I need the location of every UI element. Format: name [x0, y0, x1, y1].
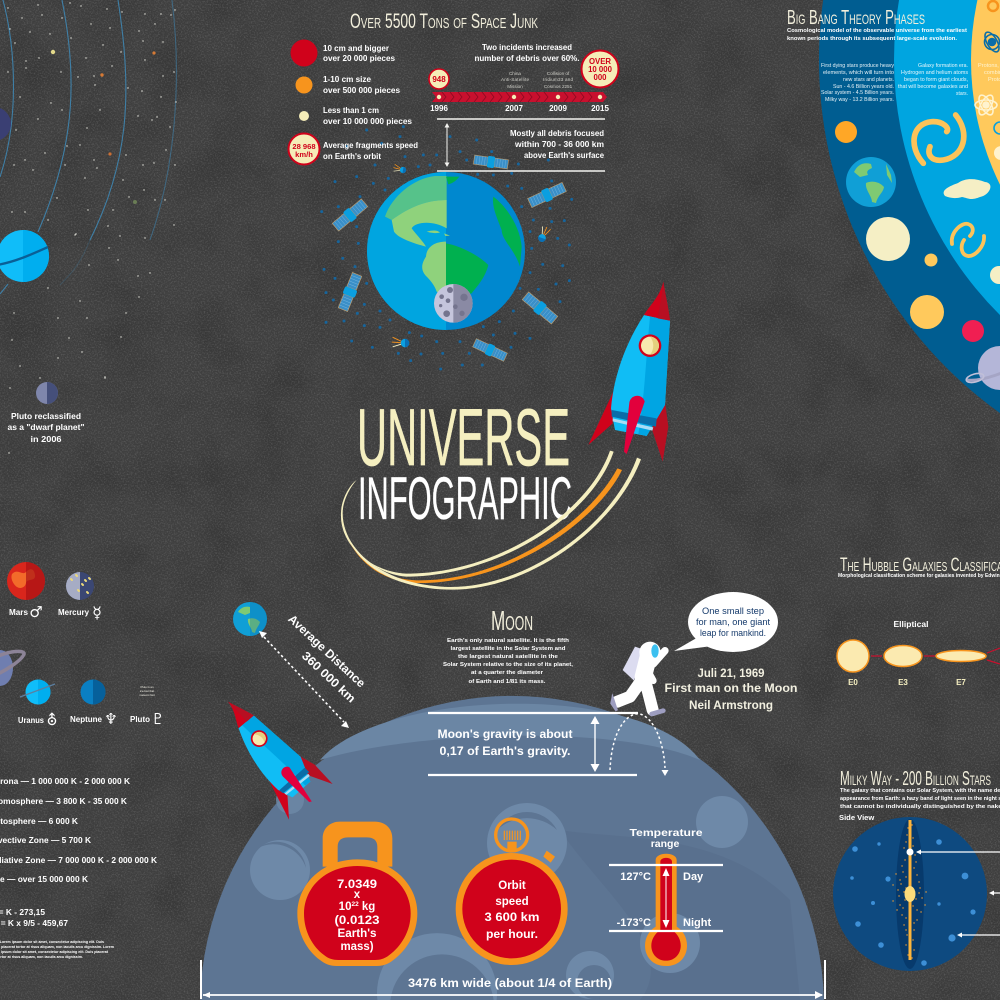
legend: debris sizes: on Earth's orbit: [323, 152, 381, 161]
icon: astronaut: [612, 642, 665, 714]
callout: speech bubble: One small step: [702, 606, 764, 616]
icon: spiral galaxy: [914, 115, 964, 163]
panel: sun temperature list: [0, 776, 157, 959]
callout: speech bubble: leap for mankind.: [700, 628, 766, 638]
text: moon description: [443, 638, 573, 685]
timeline: debris growth: 2007: [505, 104, 523, 113]
text: outer phase: Sun - 4.6 Billion years old.: [833, 84, 894, 90]
chart: temperature range: 127°C: [620, 871, 651, 883]
label: Uranus: [18, 711, 58, 729]
galaxy: E3: [884, 646, 922, 687]
note: Pluto: Pluto is an: [140, 685, 154, 689]
text: milky way description: that cannot be individually distinguished by the naked eye.: [840, 804, 1000, 810]
moon beside earth: [434, 284, 473, 323]
icon: cream dot: [990, 266, 1000, 284]
panel: milky way: [833, 768, 1000, 971]
label: Neptune: [70, 710, 118, 728]
label: Pluto: Pluto: [130, 714, 150, 724]
text: average distance: Average Distance: [285, 612, 368, 691]
text: inner phase: [978, 63, 1000, 83]
text: middle phase: Galaxy formation era.: [918, 63, 968, 69]
chart: temperature range: Temperature: [630, 827, 703, 839]
icon: sun: [835, 121, 857, 143]
note: Pluto: [139, 685, 155, 697]
timeline: debris growth: OVER: [589, 57, 611, 66]
icon: atom cream: [975, 93, 997, 117]
panel: moon: [194, 592, 825, 1000]
label: Mars: ♂: [29, 603, 43, 621]
planet: Neptune: [80, 680, 106, 704]
subtitle: big bang: known periods through its subsequent large-scale evolution.: [787, 36, 957, 42]
text: moon description: at a quarter the diameter: [471, 670, 544, 676]
icon: small rocket: [194, 698, 336, 827]
timeline: debris growth: Mission: [507, 84, 523, 89]
chart: temperature range: -173°C: [617, 917, 651, 929]
timeline: debris growth: Iridium33 and: [543, 77, 573, 82]
satellites: [331, 154, 567, 363]
label: Neptune: Neptune: [70, 714, 102, 724]
text: first man on the moon: Neil Armstrong: [689, 698, 773, 712]
panel: sun temperature list: placerat tortor at risus aliquam, non iaculis arcu dignissim. Lorem: [1, 945, 114, 949]
callout: speech bubble: [674, 592, 778, 652]
timeline: debris growth: 10 000: [588, 65, 613, 74]
outer phase ring: [819, 0, 1000, 495]
callout: speech bubble: for man, one giant: [696, 617, 771, 627]
panel: space junk: [288, 10, 618, 369]
panel: big bang theory: [787, 0, 1000, 495]
panel: inner planets: [0, 562, 165, 729]
planet: Mercury: [66, 572, 94, 600]
moon body: [200, 696, 824, 1000]
timeline: debris growth: China: [509, 71, 521, 76]
moon craters: [250, 786, 748, 1000]
legend: debris sizes: over 20 000 pieces: [323, 54, 396, 63]
range marker: debris altitude: Mostly all debris focused: [510, 129, 604, 138]
text: first man on the moon: First man on the Moon: [664, 681, 798, 695]
label: Mercury: ☿: [92, 603, 102, 622]
timeline: debris growth: 000: [593, 73, 607, 82]
icon: big rocket: [588, 282, 670, 462]
timeline: debris growth: number of debris over 60%.: [474, 54, 580, 63]
timeline: debris growth: 2009: [549, 104, 567, 113]
title: infographic: INFOGRAPHIC: [358, 465, 572, 532]
icon: stopwatch with orbit speed: [459, 819, 564, 962]
text: Pluto reclassified: [8, 411, 84, 444]
icon: weight with mass: Earth's: [338, 928, 376, 940]
icon: weight with mass: mass): [340, 941, 374, 953]
subtitle: big bang: [787, 28, 967, 42]
legend: debris sizes: 10 cm and bigger: [323, 44, 389, 53]
text: middle phase: [898, 63, 968, 97]
marker: gravity comparison: 0,17 of Earth's gravity.: [440, 744, 570, 758]
text: middle phase: Hydrogen and helium atoms: [901, 70, 968, 76]
connectors: [871, 648, 1000, 664]
icon: earth distant: [233, 602, 267, 636]
legend: debris sizes: [288, 40, 418, 164]
icon: ringed planet: [965, 346, 1000, 390]
text: outer phase: elements, which will turn into: [823, 70, 894, 76]
label: Neptune: ♆: [104, 710, 118, 728]
icon: weight with mass: [297, 822, 417, 966]
label: Pluto: ♇: [151, 710, 165, 728]
text: middle phase: that will become galaxies and: [898, 84, 968, 90]
text: outer phase: new stars and planets.: [843, 77, 894, 83]
middle phase ring: [894, 0, 1000, 420]
label: side view: Side View: [839, 813, 874, 822]
timeline: debris growth: Collision of: [547, 71, 570, 76]
legend: debris sizes: over 500 000 pieces: [323, 86, 401, 95]
label: Mars: Mars: [9, 607, 28, 617]
label: Pluto: [130, 710, 165, 728]
icon: yellow small star: [924, 254, 938, 266]
text: moon description: Earth's only natural satellite. It is the fifth: [447, 638, 569, 644]
panel: sun temperature list: ipsum dolor sit amet, consectetur adipiscing elit. Duis placerat: [1, 950, 109, 954]
marker: moon width: [201, 960, 825, 999]
icon: atom orange: [988, 1, 998, 11]
range marker: debris altitude: [437, 119, 605, 171]
icon: yellow star: [910, 295, 944, 329]
panel: solar system orbits and stars: [0, 0, 176, 453]
text: outer phase: First dying stars produce heavy: [821, 63, 894, 69]
timeline: debris growth: [429, 43, 618, 113]
galaxy: E3: E3: [898, 678, 908, 687]
title: universe: UNIVERSE: [357, 393, 570, 483]
marker: gravity comparison: Moon's gravity is about: [438, 727, 572, 741]
text: Pluto reclassified: as a "dwarf planet": [8, 422, 84, 432]
subtitle: big bang: Cosmological model of the observable universe from the earliest: [787, 28, 967, 34]
orbit lines: [0, 0, 176, 294]
heading: moon: Moon: [491, 605, 533, 636]
text: middle phase: stars.: [956, 91, 968, 97]
planet: Pluto: [36, 382, 58, 404]
timeline: debris growth: 1996: [430, 104, 448, 113]
planet: blue ringed: [0, 230, 49, 282]
panel: sun temperature list: Lorem ipsum dolor sit amet, consectetur adipiscing elit. Duis: [0, 940, 104, 944]
chart: temperature range: Day: [683, 871, 704, 883]
arrow: earth to moon distance: [259, 631, 349, 728]
icon: atom blue: [994, 122, 1000, 134]
icon: weight with mass: kg: [359, 901, 375, 913]
icon: weight with mass: 7.0349: [337, 879, 377, 891]
label: Mars: [9, 603, 43, 621]
timeline: debris growth: Anti-Satellite: [501, 77, 529, 82]
legend: debris sizes: km/h: [295, 150, 313, 159]
coloured stars: [51, 50, 156, 204]
marker: gravity comparison: [428, 713, 638, 775]
text: outer phase: Milky way - 13.2 Billion years.: [825, 97, 894, 103]
galaxy: E0: [837, 640, 869, 687]
text: moon description: of Earth and 1/81 its mass.: [468, 679, 546, 685]
text: milky way description: [840, 788, 1000, 810]
heading: big bang: Big Bang Theory Phases: [787, 7, 925, 29]
chart: temperature range: [609, 827, 723, 966]
timeline: debris growth: Two incidents increased: [482, 43, 572, 52]
label: Mercury: Mercury: [58, 607, 89, 617]
icon: stopwatch with orbit speed: Orbit: [498, 880, 526, 892]
icon: gas cloud: [944, 179, 990, 199]
chart: temperature range: range: [651, 838, 679, 850]
inner phase ring: [971, 0, 1000, 343]
note: Pluto: ice-lost that: [140, 689, 154, 693]
star field: [8, 3, 176, 453]
label: Uranus: Uranus: [18, 715, 44, 725]
text: moon description: Solar System relative to the size of its planet,: [443, 662, 573, 668]
planet: Uranus: [20, 680, 55, 704]
text: first man on the moon: [664, 666, 798, 712]
range marker: debris altitude: within 700 - 36 000 km: [514, 140, 604, 149]
text: moon description: largest satellite in the Solar System and: [450, 646, 566, 652]
label: elliptical: Elliptical: [894, 619, 928, 629]
icon: proton cream: [994, 146, 1000, 160]
legend: debris sizes: Less than 1 cm: [323, 106, 379, 115]
legend: debris sizes: Average fragments speed: [323, 141, 418, 150]
range marker: debris altitude: above Earth's surface: [524, 151, 605, 160]
icon: earth small: [846, 157, 896, 207]
chart: temperature range: Night: [683, 917, 711, 929]
planet at left edge: [0, 107, 11, 141]
diagram: galaxy side view: [833, 817, 1000, 971]
galaxy: E7: [936, 650, 986, 687]
galaxy: E7: E7: [956, 678, 966, 687]
icon: stopwatch with orbit speed: speed: [495, 896, 529, 908]
legend: debris sizes: 28 968: [292, 142, 316, 151]
earth: [367, 172, 525, 330]
icon: weight with mass: 10: [339, 901, 351, 913]
icon: weight with mass: (0.0123: [334, 915, 380, 927]
debris dots: [322, 127, 572, 369]
timeline: debris growth: 948: [432, 75, 446, 84]
arrow: jump arc: [610, 714, 668, 776]
panel: hubble classification: [837, 555, 1000, 687]
text: outer phase: [821, 63, 894, 103]
planet: Saturn partial: [0, 650, 24, 686]
icon: weight with mass: x: [354, 889, 361, 901]
text: outer phase: Solar system - 4.5 Billion years.: [821, 90, 894, 96]
text: first man on the moon: Juli 21, 1969: [698, 666, 765, 680]
label: Mercury: [58, 603, 102, 622]
text: middle phase: began to form giant clouds,: [904, 77, 968, 83]
icon: weight with mass: 22: [351, 901, 359, 908]
text: Pluto reclassified: Pluto reclassified: [11, 411, 81, 421]
legend: debris sizes: 1-10 cm size: [323, 75, 372, 84]
icon: stopwatch with orbit speed: 3 600 km: [484, 912, 540, 924]
marker: moon width: 3476 km wide (about 1/4 of Earth): [408, 976, 612, 990]
text: Pluto reclassified: in 2006: [30, 434, 62, 444]
legend: debris sizes: over 10 000 000 pieces: [323, 117, 413, 126]
icon: small spiral galaxy: [952, 224, 984, 256]
note: Pluto: meteors lost: [139, 693, 155, 697]
arrow: rocket trail: [341, 451, 641, 590]
galaxy: E0: E0: [848, 678, 858, 687]
icon: cream star: [866, 217, 910, 261]
icon: red star: [962, 320, 984, 342]
timeline: debris growth: Cosmos 2251: [544, 84, 573, 89]
icon: stopwatch with orbit speed: per hour.: [486, 929, 538, 941]
text: average distance: 360 000 km: [299, 649, 358, 705]
label: Uranus: ⛢: [46, 711, 58, 729]
planet: Mars: [7, 562, 45, 600]
icon: atom dark blue: [982, 30, 1000, 54]
timeline: debris growth: 2015: [591, 104, 609, 113]
heading: space junk: Over 5500 Tons of Space Junk: [350, 10, 538, 33]
text: moon description: the largest natural satellite in the: [458, 654, 559, 660]
